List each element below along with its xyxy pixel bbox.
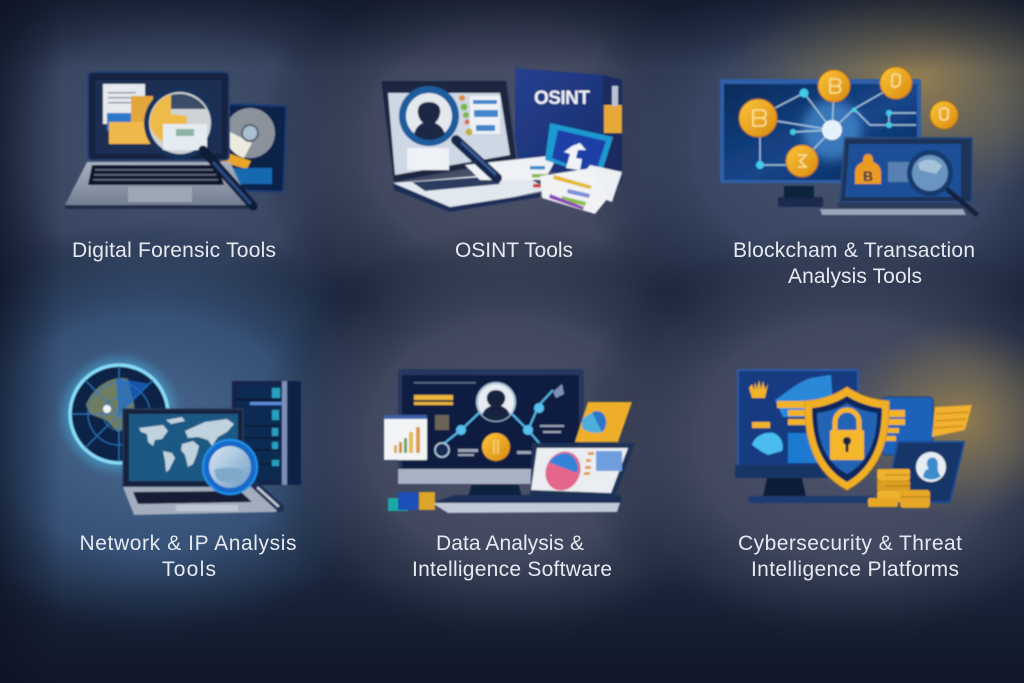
label: Blockcham & Transaction (733, 239, 975, 262)
label: Data Analysis & (436, 532, 584, 555)
panel: blockchain and transaction analysis tools (720, 67, 976, 288)
icon: shield with padlock, monitors and coins (735, 370, 972, 508)
label (733, 239, 975, 288)
panel: network and IP analysis tools (63, 358, 301, 581)
label (412, 532, 612, 581)
label: Digital Forensic Tools (72, 239, 276, 262)
icon: radar, server and laptop with world map (63, 358, 301, 515)
label: Analysis Tools (788, 265, 922, 288)
icon: monitor with link graph, chart card and laptop (384, 369, 635, 513)
panel: digital forensic tools (65, 72, 286, 262)
label: Intelligence Platforms (751, 558, 959, 581)
label: Network & IP Analysis (80, 532, 296, 555)
label (738, 532, 962, 581)
panel: cybersecurity and threat intelligence platforms (735, 370, 972, 581)
panel: OSINT tools (380, 68, 622, 262)
label (80, 532, 296, 581)
icon: laptop, OSINT book, social card and magnifier: OSINT (534, 88, 590, 109)
icon: laptop, OSINT book, social card and magnifier (380, 68, 622, 214)
icon: laptop, hard drive and magnifier (65, 72, 286, 209)
label: OSINT Tools (455, 239, 573, 262)
icon: monitor with coin network and laptop: B (863, 168, 873, 184)
icon: monitor with coin network and laptop (720, 67, 976, 215)
label: Tools (162, 558, 216, 581)
panel: data analysis and intelligence software (384, 369, 635, 581)
label: Intelligence Software (412, 558, 612, 581)
label: Cybersecurity & Threat (738, 532, 962, 555)
